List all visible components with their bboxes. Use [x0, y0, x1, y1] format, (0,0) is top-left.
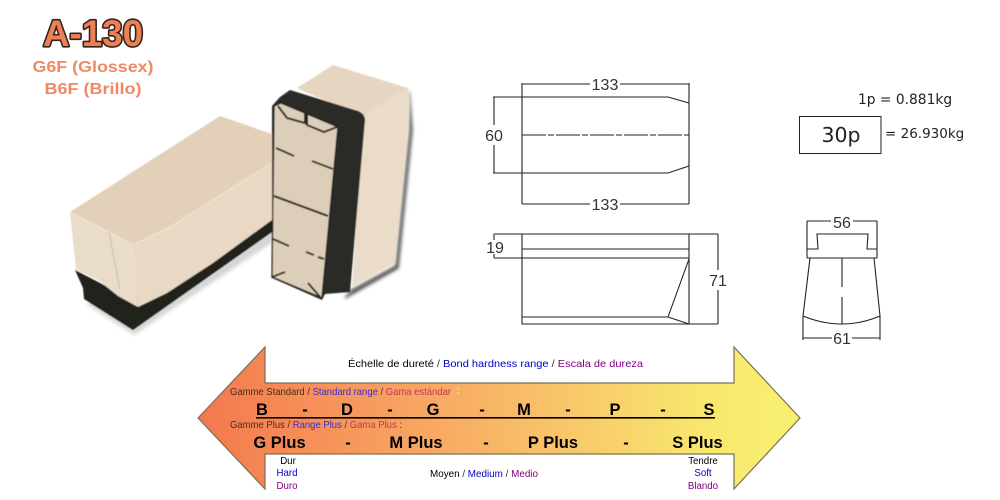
- plus grades row: S Plus: [672, 434, 723, 452]
- standard grades row: G: [427, 401, 439, 419]
- subtitle: G6F Glossex: G6F (Glossex): [32, 59, 154, 76]
- left block: [70, 116, 276, 335]
- plus grades row: M Plus: [389, 434, 443, 452]
- plus grades row: -: [483, 434, 489, 452]
- plus grades row: -: [345, 434, 351, 452]
- weight box: 30p: 30p: [821, 123, 861, 147]
- standard range label: Gamme Standard / Standard range / Gama estándar: [230, 387, 452, 398]
- weight note: 1p: 1p = 0.881kg: [858, 92, 952, 108]
- right block: [272, 65, 412, 300]
- plus range label: Gamme Plus / Range Plus / Gama Plus :: [230, 420, 402, 431]
- product illustration: two abrasive blocks: [70, 65, 412, 335]
- dimension 19: 19: [486, 240, 504, 257]
- subtitle: B6F Brillo: B6F (Brillo): [44, 81, 142, 98]
- standard range colon: :: [456, 383, 460, 397]
- standard grades row: D: [341, 401, 353, 419]
- standard grades row: P: [609, 401, 621, 419]
- plus grades row: -: [623, 434, 629, 452]
- hard label: Dur: [280, 456, 297, 467]
- standard grades row: -: [660, 401, 666, 419]
- dimension 71: 71: [709, 273, 727, 290]
- standard grades row: B: [256, 401, 268, 419]
- medium label: Moyen / Medium / Medio: [430, 469, 538, 480]
- hardness scale double arrow: [198, 347, 800, 492]
- standard grades row: -: [387, 401, 393, 419]
- hard label: Hard: [276, 468, 298, 479]
- title: A-130: A-130: [43, 13, 143, 54]
- dimension 133 top: 133: [592, 77, 618, 94]
- soft label: Tendre: [688, 456, 718, 467]
- soft label: [688, 456, 718, 492]
- plus grades row: P Plus: [528, 434, 578, 452]
- plus grades row: [253, 434, 723, 452]
- technical drawing: front view: [803, 215, 880, 348]
- dimension 133 bottom: 133: [592, 197, 618, 214]
- plate groove lines: [272, 106, 337, 297]
- standard grades row: -: [479, 401, 485, 419]
- weight box: 30p: [800, 116, 881, 154]
- scale heading: Échelle de dureté / Bond hardness range / Escala de dureza: [348, 357, 643, 370]
- dimension 60: 60: [485, 128, 503, 145]
- soft label: Soft: [694, 468, 712, 479]
- total weight: = 26.930kg: [885, 126, 964, 142]
- soft label: Blando: [688, 481, 718, 492]
- dimension 56: 56: [833, 215, 851, 232]
- standard grades row: [256, 401, 715, 419]
- dimension 61: 61: [833, 331, 851, 348]
- standard grades row: -: [302, 401, 308, 419]
- technical drawing: side view: [486, 234, 727, 324]
- standard grades row: -: [565, 401, 571, 419]
- hard label: [276, 456, 298, 492]
- technical drawing: top view: [485, 77, 689, 214]
- standard grades row: M: [517, 401, 531, 419]
- standard grades row: S: [703, 401, 715, 419]
- plus grades row: G Plus: [253, 434, 306, 452]
- hard label: Duro: [276, 481, 298, 492]
